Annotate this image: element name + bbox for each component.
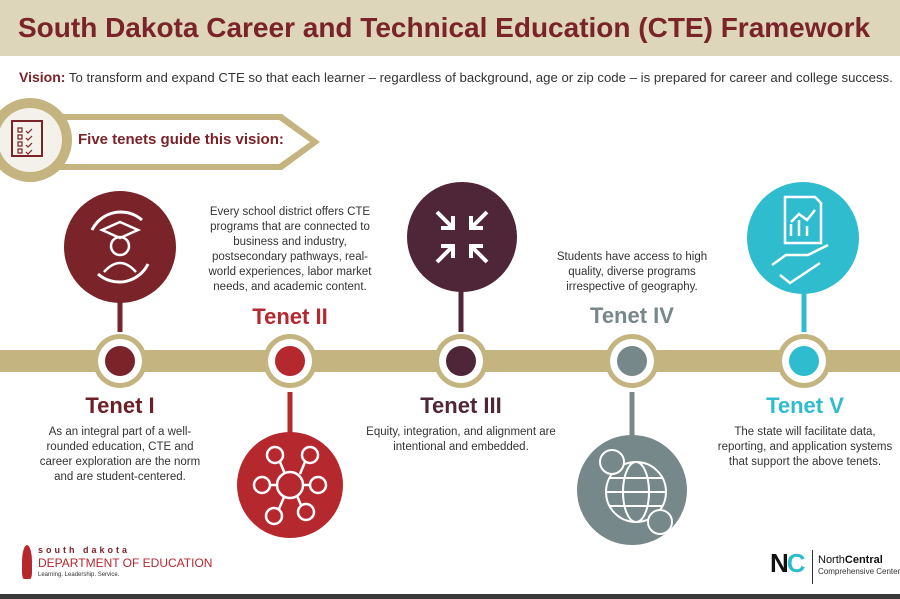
title: South Dakota Career and Technical Education (CTE) Framework xyxy=(18,12,870,43)
icon circle: tenet II network xyxy=(237,432,343,538)
logo: NorthCentral: NorthCentral xyxy=(818,554,883,566)
tenet III: Tenet III xyxy=(420,393,502,418)
tenet III: Equity, integration, and alignment are intentional and embedded. xyxy=(366,426,556,453)
tenet IV: Students have access to high quality, diverse programs irrespective of geography. xyxy=(557,251,707,293)
logo: SD dept of education: DEPARTMENT OF EDUCATION xyxy=(38,556,212,570)
tenet I: As an integral part of a well-rounded education, CTE and career exploration are the norm and are student-centered. xyxy=(40,426,200,483)
logo: NorthCentral: NC xyxy=(770,548,804,578)
logo: NorthCentral xyxy=(770,548,900,584)
vision statement: Vision: To transform and expand CTE so that each learner – regardless of background, age or zip code – is prepared for career and college success. xyxy=(19,69,893,85)
tenet IV: Tenet IV xyxy=(590,303,674,328)
five tenets label: Five tenets guide this vision: xyxy=(78,131,284,148)
logo: NorthCentral: Comprehensive Center xyxy=(818,567,900,576)
tenet I: Tenet I xyxy=(85,393,155,418)
tenet IV xyxy=(557,251,707,328)
icon circle: tenet IV globe xyxy=(577,435,687,545)
tenet V: Tenet V xyxy=(766,393,844,418)
tenet I xyxy=(40,393,200,483)
logo: SD dept of education xyxy=(22,545,212,579)
icon circle: tenet I graduate xyxy=(64,191,176,303)
banner: five tenets xyxy=(0,98,320,182)
nodes xyxy=(93,334,831,388)
timeline bar xyxy=(0,350,900,372)
logo: SD dept of education: south dakota xyxy=(38,545,130,555)
icon circle: tenet V hand chart xyxy=(747,182,859,294)
tenet V: The state will facilitate data, reporting, and application systems that support the above tenets. xyxy=(718,426,892,468)
tenet III xyxy=(366,393,556,453)
tenet V xyxy=(718,393,892,468)
tenet II: Every school district offers CTE programs that are connected to business and industry, postsecondary pathways, real-world experiences, labor market needs, and academic content. xyxy=(208,206,372,293)
logo: SD dept of education: Learning. Leadership. Service. xyxy=(38,572,119,578)
connectors xyxy=(120,290,804,440)
header band xyxy=(0,0,900,56)
icon circle: tenet III arrows xyxy=(407,182,517,292)
bottom border xyxy=(0,594,900,599)
tenet II: Tenet II xyxy=(252,304,328,329)
